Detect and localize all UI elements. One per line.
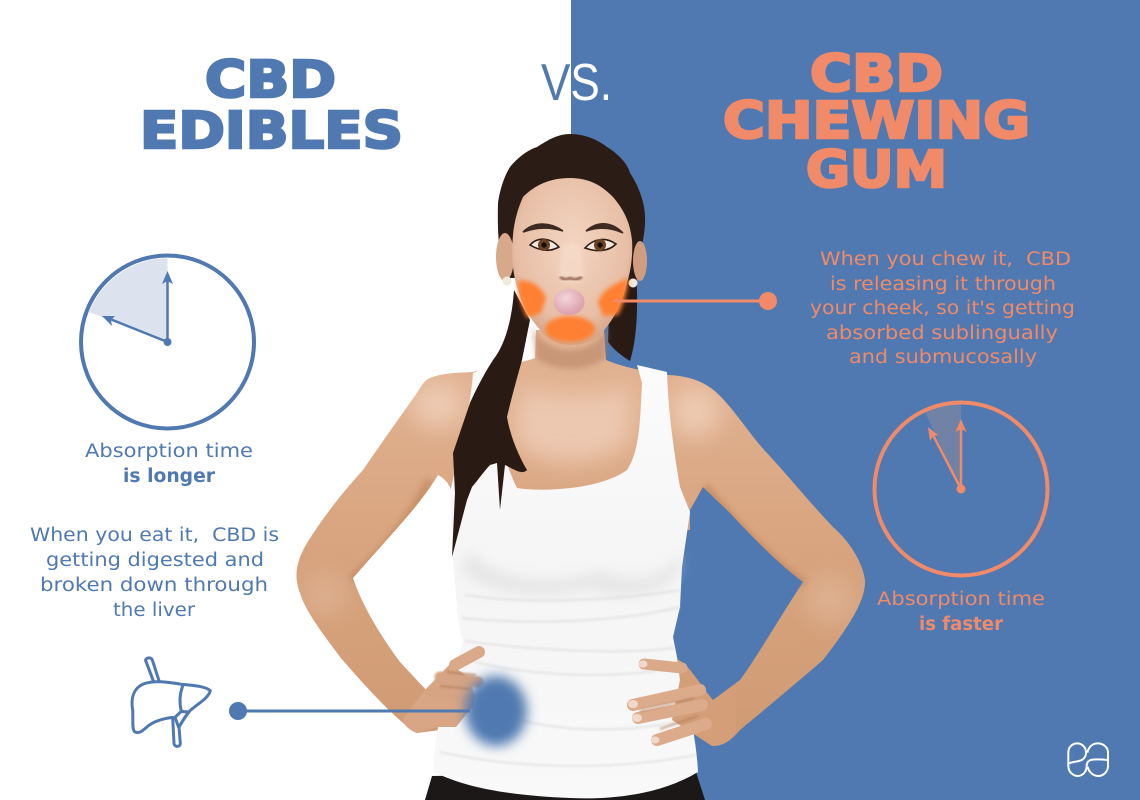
text: absorption time longer: Absorption time bbox=[85, 441, 253, 462]
white tank top bbox=[434, 365, 698, 798]
hair behind neck, right side bbox=[608, 270, 637, 361]
text: absorption time faster bbox=[877, 589, 1045, 635]
panel: right blue background bbox=[571, 0, 1140, 800]
text: chewing gum description: is releasing it through bbox=[830, 274, 1056, 295]
icon: brand logo bbox=[1068, 743, 1108, 776]
connector: cheek to text bbox=[614, 292, 777, 310]
title: CBD Chewing Gum: CBD bbox=[810, 45, 943, 104]
text: absorption time faster: is faster bbox=[919, 614, 1004, 635]
text: chewing gum description: absorbed sublingually bbox=[826, 323, 1058, 344]
eyes bbox=[530, 239, 616, 251]
face bbox=[512, 178, 632, 345]
neck shadow bbox=[532, 325, 608, 368]
text: edibles description bbox=[30, 525, 279, 621]
text: chewing gum description: When you chew it, CBD bbox=[820, 249, 1071, 270]
text: chewing gum description: and submucosally bbox=[849, 347, 1037, 368]
nose bbox=[559, 245, 584, 283]
title: CBD Edibles bbox=[140, 51, 403, 161]
orange absorption glow: cheeks and lip bbox=[518, 278, 628, 342]
text: edibles description: When you eat it, CBD is bbox=[30, 525, 279, 546]
title: CBD Chewing Gum: CHEWING bbox=[723, 92, 1030, 151]
title: vs.: VS. bbox=[541, 54, 612, 112]
text: edibles description: getting digested and bbox=[46, 550, 264, 571]
earrings bbox=[502, 276, 512, 286]
title: CBD Edibles: CBD bbox=[205, 51, 336, 110]
connector: liver to body bbox=[229, 702, 470, 720]
text: absorption time longer bbox=[85, 441, 253, 487]
text: absorption time longer: is longer bbox=[123, 466, 216, 487]
photo: woman chewing gum bbox=[296, 134, 865, 800]
title: CBD Chewing Gum: GUM bbox=[806, 141, 947, 200]
pants bbox=[425, 772, 705, 800]
text: chewing gum description bbox=[810, 249, 1075, 368]
text: chewing gum description: your cheek, so it's getting bbox=[810, 298, 1075, 319]
title: vs.: VS. bbox=[541, 54, 612, 112]
text: edibles description: the liver bbox=[113, 600, 195, 621]
icon: liver bbox=[132, 658, 210, 746]
bust shading bbox=[460, 550, 680, 596]
right hand bbox=[628, 659, 736, 746]
eyebrows bbox=[523, 224, 623, 233]
blue absorption glow over liver bbox=[465, 676, 527, 746]
clock: edibles, longer time bbox=[81, 256, 254, 428]
ears bbox=[496, 233, 514, 281]
shirt folds bbox=[440, 590, 695, 766]
left hand bbox=[402, 652, 479, 733]
title: vs. bbox=[541, 64, 608, 100]
body shading bbox=[305, 381, 854, 624]
ponytail hair bbox=[452, 290, 530, 557]
text: absorption time faster: Absorption time bbox=[877, 589, 1045, 610]
text: edibles description: broken down through bbox=[40, 575, 268, 596]
hair bbox=[498, 134, 645, 278]
bubble gum bbox=[554, 289, 584, 315]
title: CBD Edibles: EDIBLES bbox=[140, 102, 403, 161]
title: CBD Chewing Gum bbox=[723, 45, 1030, 200]
clock: chewing gum, faster time bbox=[874, 402, 1048, 576]
body and arms bbox=[296, 330, 865, 746]
